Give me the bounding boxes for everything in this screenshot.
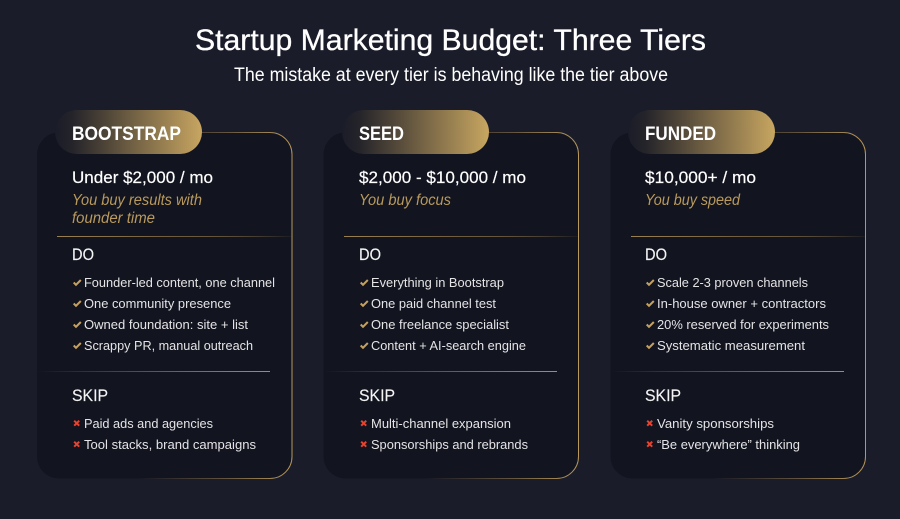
- do list: In-house owner + contractors: [657, 296, 826, 311]
- budget range: Under $2,000 / mo: [72, 168, 213, 187]
- panel: funded: [610, 110, 866, 478]
- do list: Content + AI-search engine: [371, 338, 526, 353]
- do list: Everything in Bootstrap: [371, 275, 504, 290]
- panel: seed: [324, 110, 579, 478]
- do list: [74, 275, 275, 353]
- skip list: [647, 416, 800, 452]
- tier badge: bootstrap: BOOTSTRAP: [72, 124, 181, 145]
- card background: [37, 132, 292, 478]
- tier badge: bootstrap: [55, 110, 202, 154]
- tagline: [72, 192, 202, 227]
- skip list: Paid ads and agencies: [84, 416, 213, 431]
- skip list: Tool stacks, brand campaigns: [84, 437, 256, 452]
- do list: Owned foundation: site + list: [84, 317, 248, 332]
- tagline: You buy results with: [72, 192, 202, 209]
- do heading: DO: [72, 245, 94, 264]
- subtitle: The mistake at every tier is behaving like the tier above: [234, 65, 668, 86]
- title: Startup Marketing Budget: Three Tiers: [195, 24, 706, 57]
- do list: Scale 2-3 proven channels: [657, 275, 808, 290]
- skip list: [361, 416, 528, 452]
- skip list: Multi-channel expansion: [371, 416, 511, 431]
- card background: [610, 132, 866, 478]
- tier badge: seed: [342, 110, 489, 154]
- tagline: You buy speed: [645, 192, 741, 209]
- tagline: You buy focus: [359, 192, 451, 209]
- skip heading: SKIP: [359, 386, 395, 405]
- skip list: Vanity sponsorships: [657, 416, 774, 431]
- skip heading: SKIP: [645, 386, 681, 405]
- do list: Systematic measurement: [657, 338, 805, 353]
- do list: One paid channel test: [371, 296, 496, 311]
- skip heading: SKIP: [72, 386, 108, 405]
- do list: [647, 275, 829, 353]
- skip list: [74, 416, 256, 452]
- card background: [324, 132, 578, 478]
- do list: One freelance specialist: [371, 317, 509, 332]
- do list: [361, 275, 526, 353]
- panel: bootstrap: [37, 110, 292, 478]
- budget range: $10,000+ / mo: [645, 168, 756, 187]
- do list: Founder-led content, one channel: [84, 275, 275, 290]
- budget range: $2,000 - $10,000 / mo: [359, 168, 526, 187]
- tier badge: seed: SEED: [359, 124, 404, 145]
- skip list: Sponsorships and rebrands: [371, 437, 528, 452]
- do heading: DO: [645, 245, 667, 264]
- do heading: DO: [359, 245, 381, 264]
- tier badge: funded: FUNDED: [645, 124, 716, 145]
- do list: One community presence: [84, 296, 231, 311]
- skip list: “Be everywhere” thinking: [657, 437, 800, 452]
- tier badge: funded: [628, 110, 775, 154]
- tagline: founder time: [72, 210, 155, 227]
- do list: 20% reserved for experiments: [657, 317, 829, 332]
- do list: Scrappy PR, manual outreach: [84, 338, 253, 353]
